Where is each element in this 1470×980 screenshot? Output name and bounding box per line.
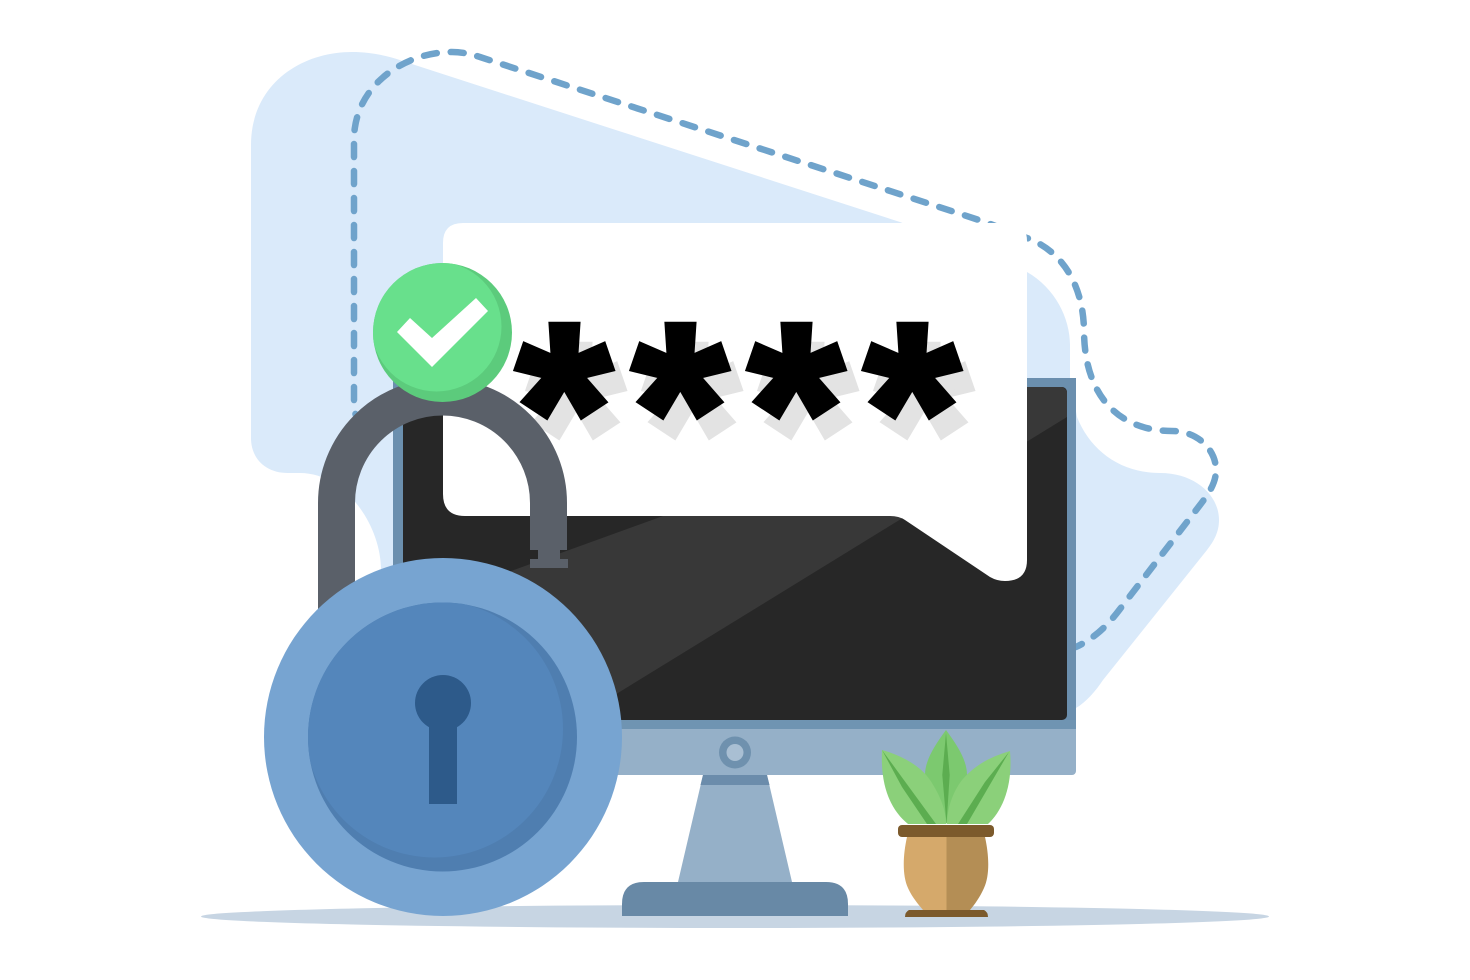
padlock shackle: [336, 397, 568, 610]
ground shadow: [201, 905, 1269, 928]
padlock body: [264, 558, 622, 916]
chin shade strip: [393, 720, 1076, 729]
check mark: [397, 298, 488, 367]
asterisk shadows: *: [644, 292, 740, 567]
asterisk shadows: *: [760, 292, 856, 567]
asterisk shadows: [528, 292, 972, 567]
monitor screen: [403, 387, 1067, 720]
monitor stand: [678, 775, 792, 882]
right leaf: [947, 751, 1011, 824]
screen highlight: [500, 387, 1067, 766]
pot: [904, 837, 988, 910]
dashed outline: [354, 52, 1216, 647]
center leaf: [925, 730, 967, 824]
asterisks: *: [748, 272, 844, 547]
potted plant: [882, 730, 1011, 917]
asterisks: *: [516, 272, 612, 547]
asterisks: *: [864, 272, 960, 547]
background blob: [251, 52, 1219, 708]
asterisk shadows: *: [876, 292, 972, 567]
monitor frame: [393, 378, 1076, 728]
camera button: [719, 736, 751, 768]
illustration: password security: [201, 48, 1269, 928]
monitor base: [622, 882, 848, 916]
password speech bubble: [443, 223, 1027, 581]
green check badge: [372, 262, 512, 402]
keyhole: [415, 675, 471, 804]
password asterisks: [516, 272, 972, 567]
pot rim: [898, 825, 994, 837]
left leaf: [882, 750, 946, 824]
asterisks: *: [632, 272, 728, 547]
asterisks: [516, 272, 960, 547]
monitor: [393, 378, 1076, 916]
pot foot: [905, 910, 988, 917]
monitor chin: [393, 720, 1076, 775]
asterisk shadows: *: [528, 292, 624, 567]
